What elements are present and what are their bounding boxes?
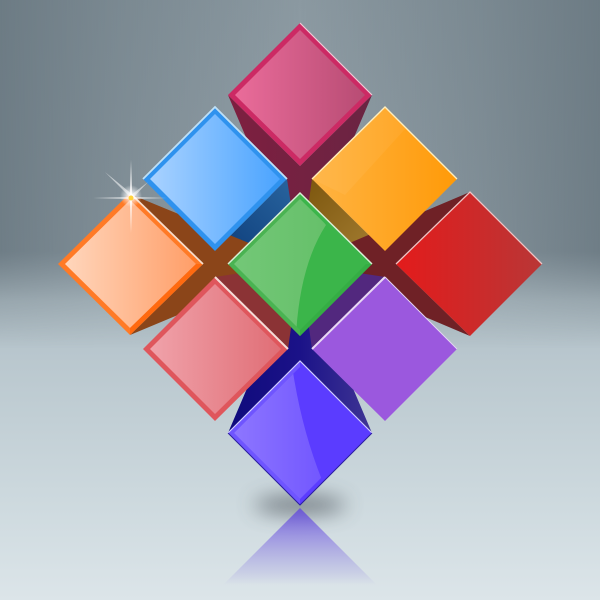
tile: indigo [228,361,372,505]
shadow: purple [300,264,385,349]
shadow: red [300,192,470,336]
tile: yellow [312,107,457,251]
tile: pink [228,23,372,166]
tile: blue [143,107,287,251]
shadow: peach [130,194,300,335]
side face: yellow [300,179,385,264]
tile: peach [58,193,203,335]
side face: blue [215,179,300,264]
floor shadow [254,496,346,514]
reflection [223,508,377,585]
tile: green [228,193,372,336]
shadow: salmon [215,264,300,349]
side face: pink [228,95,372,264]
tile: salmon [143,277,288,421]
side face: indigo [228,264,372,433]
tile: purple [312,277,457,421]
tile: red [396,192,542,336]
icon: sparkle [93,160,167,233]
